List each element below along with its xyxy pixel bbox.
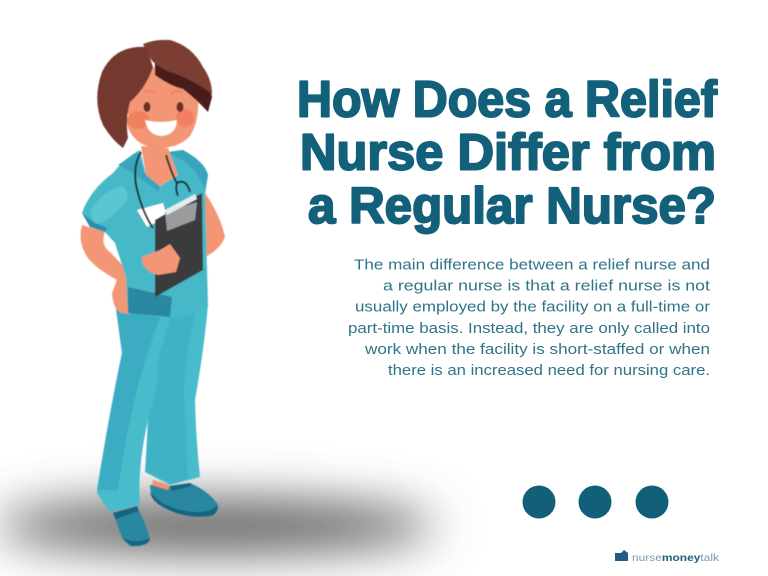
pocket	[128, 287, 172, 317]
body text: work when the facility is short-staffed or when	[364, 342, 710, 358]
smile	[145, 120, 177, 136]
nurse illustration	[81, 40, 225, 546]
badge	[137, 203, 167, 227]
logo	[615, 550, 720, 564]
clipboard	[155, 193, 203, 297]
eyebrows	[144, 91, 182, 94]
logo icon	[615, 550, 628, 561]
hair	[97, 40, 212, 148]
body text	[348, 258, 710, 379]
title	[297, 70, 718, 234]
left shoe	[113, 506, 150, 546]
title: Nurse Differ from	[300, 124, 716, 180]
left arm	[81, 225, 130, 314]
scrub top	[82, 150, 208, 318]
body text: usually employed by the facility on a full-time or	[355, 300, 710, 316]
cheeks	[127, 111, 149, 129]
eyes	[144, 102, 150, 112]
three dots	[522, 486, 668, 518]
title: a Regular Nurse?	[308, 177, 716, 234]
trousers	[97, 295, 208, 512]
ear and earring	[122, 114, 130, 120]
hand on clipboard	[142, 244, 180, 275]
neck and chest	[141, 146, 178, 186]
body text: part-time basis. Instead, they are only called into	[348, 321, 710, 337]
logo wordmark: nurse money talk	[632, 552, 720, 564]
right arm	[150, 190, 225, 272]
right shoe	[150, 480, 218, 517]
body text: a regular nurse is that a relief nurse is not	[383, 278, 710, 294]
ground shadow	[0, 500, 435, 552]
stethoscope	[135, 152, 190, 228]
body text: The main difference between a relief nurse and	[354, 258, 710, 274]
body text: there is an increased need for nursing care.	[388, 363, 710, 379]
title: How Does a Relief	[297, 70, 718, 128]
head	[122, 60, 198, 148]
